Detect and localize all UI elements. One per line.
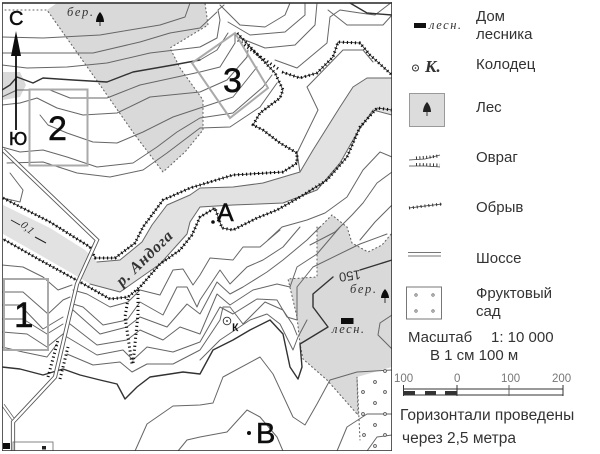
legend: orchard (406, 285, 552, 320)
point B: В (256, 418, 275, 450)
point A: А (217, 199, 234, 227)
scale bar: 100 (501, 373, 520, 385)
section 3 (192, 33, 268, 118)
legend: orchard: Фруктовый (476, 285, 552, 302)
north arrow: С (9, 8, 23, 30)
highway (3, 150, 97, 451)
buildings at lower left (3, 442, 53, 451)
icon: tree north (96, 12, 104, 26)
point B (247, 418, 275, 450)
river Andoga (3, 78, 392, 292)
scale text: 1: 10 000 (491, 329, 554, 346)
scale bar: 100 (394, 373, 413, 385)
legend: cliff: Обрыв (476, 199, 523, 216)
scale text: В 1 см 100 м (430, 347, 518, 364)
legend: ravine: Овраг (476, 149, 518, 166)
legend: well: К. (424, 57, 441, 76)
river name: р. Андога (112, 227, 177, 291)
contour lines (2, 2, 392, 451)
contour interval note (400, 407, 574, 447)
label 3: 3 (223, 62, 242, 100)
legend: well (412, 56, 536, 76)
north arrow (9, 8, 27, 149)
scale text (408, 329, 554, 364)
scale bar (394, 373, 571, 396)
legend: highway: Шоссе (476, 250, 521, 267)
legend: forester house: лесника (476, 26, 533, 43)
legend: forester house: лесн. (428, 18, 463, 32)
legend: highway (408, 250, 521, 267)
scale bar: 0 (454, 373, 460, 385)
current speed label: 0,1 (18, 219, 36, 237)
forest: north area (47, 3, 208, 172)
label 1: 1 (14, 296, 33, 335)
map frame (2, 3, 392, 451)
legend: forest (410, 94, 502, 126)
contour interval note: через 2,5 метра (402, 430, 516, 447)
contour interval note: Горизонтали проведены (400, 407, 574, 424)
legend: well: Колодец (476, 56, 536, 73)
section 1 (4, 279, 48, 350)
contour value 150: 150 (338, 267, 362, 285)
well: к (232, 318, 239, 334)
scale text: Масштаб (408, 329, 472, 346)
scale bar: 200 (552, 373, 571, 385)
ravines and cliffs (3, 33, 392, 379)
legend: ravine (409, 149, 518, 167)
label: birch forest north: бер. (67, 5, 95, 19)
orchard (362, 370, 386, 447)
section 2 (30, 90, 88, 166)
legend (394, 8, 574, 447)
well (223, 317, 239, 334)
current speed label (11, 219, 46, 243)
north arrow: Ю (9, 129, 27, 149)
legend: forester house: Дом (476, 8, 505, 25)
forest boundaries (5, 3, 392, 440)
label 2: 2 (48, 110, 67, 148)
topographic map (2, 2, 392, 451)
icon: tree south (381, 289, 389, 303)
forest: south-east area (288, 215, 392, 415)
forest: small patch at left edge (3, 72, 26, 100)
legend: forest: Лес (476, 99, 502, 116)
legend: orchard: сад (476, 303, 501, 320)
forester house: лесн. (331, 322, 366, 336)
legend: cliff (409, 199, 523, 216)
label: birch forest south: бер. (350, 282, 378, 296)
legend: forester house (414, 8, 533, 43)
